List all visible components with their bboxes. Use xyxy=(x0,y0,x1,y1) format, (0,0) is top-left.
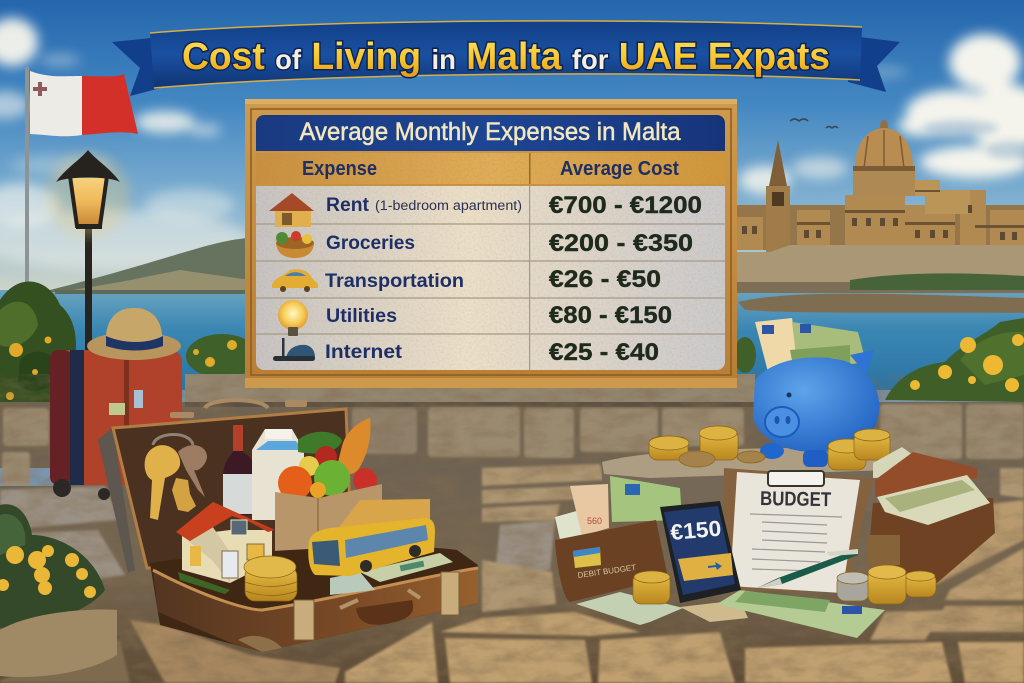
table heading bar: Average Monthly Expenses in Malta xyxy=(300,118,681,146)
BUDGET heading: BUDGET xyxy=(760,488,831,511)
row: rent xyxy=(269,192,702,227)
row: rent: (1-bedroom apartment) xyxy=(375,198,522,213)
street lamp xyxy=(46,150,130,350)
yellow flowers bottom left xyxy=(0,504,105,628)
icon: yellow car xyxy=(272,269,318,292)
cathedral dome xyxy=(853,120,915,196)
stone ledge for budget items xyxy=(602,447,900,512)
brown wallet with card xyxy=(555,520,668,602)
foreground rock xyxy=(0,610,117,677)
table column header row xyxy=(256,153,725,184)
icon: light bulb xyxy=(278,300,308,336)
icon: wifi router xyxy=(273,338,315,361)
church tower xyxy=(766,140,790,252)
fort wall xyxy=(735,245,1024,290)
row: groceries: Groceries xyxy=(326,233,415,254)
coin stacks on ledge xyxy=(649,426,890,470)
pen xyxy=(757,549,858,588)
banknotes on the ground xyxy=(576,590,885,638)
open vintage suitcase xyxy=(98,400,478,652)
green bush left xyxy=(0,281,76,402)
red rolling suitcase with straw hat xyxy=(50,308,182,500)
row: utilities xyxy=(278,300,672,336)
table heading bar xyxy=(256,115,725,151)
clouds xyxy=(0,18,1024,270)
sign table frame xyxy=(245,99,737,388)
row: internet: €25 - €40 xyxy=(549,339,659,366)
shoreline rocks xyxy=(738,294,1024,313)
table rows background xyxy=(256,186,725,370)
smartphone showing 150 euros: €150 xyxy=(669,516,722,545)
title banner xyxy=(112,21,900,96)
suitcase lid xyxy=(98,400,352,573)
stone texture overlay xyxy=(0,374,1024,683)
banknotes behind wallet: 560 xyxy=(587,516,602,526)
row: groceries xyxy=(276,230,693,258)
row: transportation: €26 - €50 xyxy=(549,266,661,293)
brown wallet with card: DEBIT BUDGET xyxy=(577,563,637,580)
table column header row: Expense xyxy=(302,158,377,180)
icon: house xyxy=(269,193,314,227)
right flowers xyxy=(885,318,1024,402)
banknotes in slot xyxy=(755,318,866,376)
coin stack front of wallet xyxy=(633,571,670,604)
row: internet: Internet xyxy=(325,342,403,363)
wine bottle xyxy=(223,425,257,515)
milk carton xyxy=(252,429,304,520)
piggy bank with banknotes xyxy=(753,318,879,467)
coin stacks right front xyxy=(837,565,936,604)
banknotes in suitcase xyxy=(330,553,453,595)
banknotes behind wallet xyxy=(555,476,682,540)
row: rent: Rent xyxy=(326,195,370,216)
table column header row: Average Cost xyxy=(560,158,679,180)
distant coast on the left xyxy=(50,238,250,294)
model bus xyxy=(308,518,435,576)
model house xyxy=(176,502,275,594)
title text: Cost of Living in Malta for UAE Expats xyxy=(182,36,830,78)
row: transportation xyxy=(272,266,661,293)
row: internet xyxy=(273,338,659,366)
flower bush behind the table xyxy=(186,334,756,378)
smartphone showing 150 euros xyxy=(660,501,741,603)
Valletta skyline xyxy=(735,120,1024,313)
row: groceries: €200 - €350 xyxy=(549,230,693,257)
brown leather bag at right xyxy=(868,447,995,583)
row: transportation: Transportation xyxy=(325,271,464,292)
suitcase base xyxy=(150,547,478,652)
flag of Malta on pole xyxy=(25,67,138,282)
sky background xyxy=(0,0,1024,300)
paper bag with fruit and bread xyxy=(275,418,382,570)
coin stack in suitcase xyxy=(244,556,297,601)
budget clipboard xyxy=(722,468,874,593)
water xyxy=(0,290,1024,390)
row: utilities: Utilities xyxy=(326,306,397,327)
stone wall xyxy=(0,374,1024,486)
icon: basket of vegetables xyxy=(276,231,314,258)
row: utilities: €80 - €150 xyxy=(549,302,672,329)
ticket xyxy=(340,499,430,535)
keys xyxy=(145,434,207,520)
row: rent: €700 - €1200 xyxy=(549,192,702,219)
paved ground xyxy=(0,462,1024,683)
birds xyxy=(790,119,838,128)
